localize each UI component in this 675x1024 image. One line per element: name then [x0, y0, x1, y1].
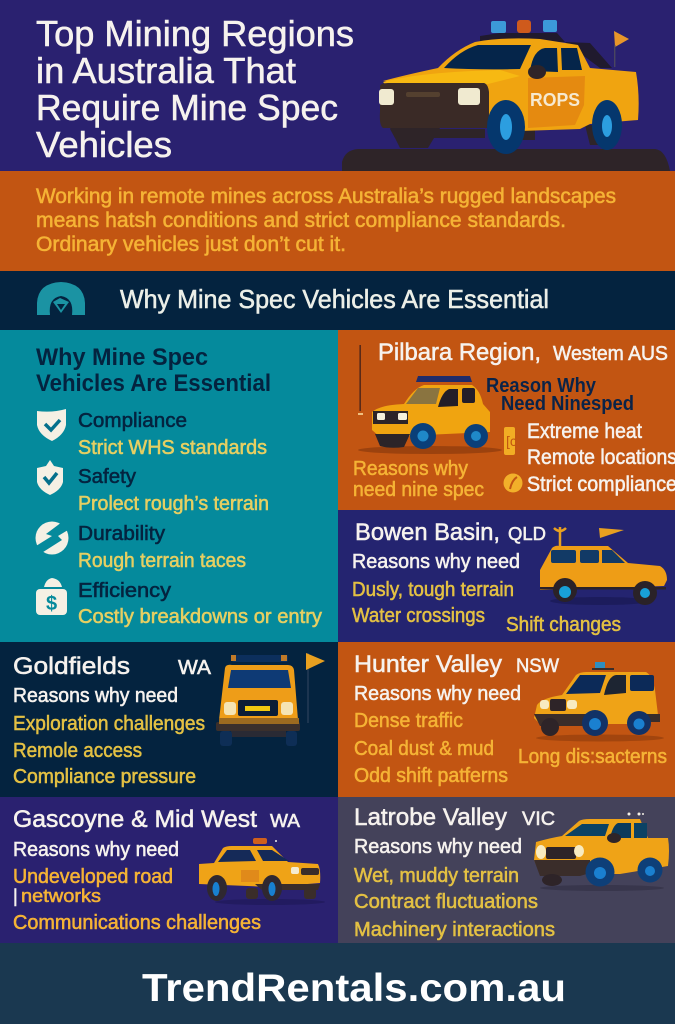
icon: durability bolt — [36, 522, 68, 554]
icon: bowen vehicle — [540, 527, 667, 605]
goldfields list: Remole access — [13, 740, 142, 762]
panel: bowen basin — [338, 510, 675, 642]
hunter heading — [354, 651, 559, 678]
durability item: Durability — [78, 523, 165, 545]
pilbara heading: Pilbara Region, — [378, 339, 541, 366]
pilbara heading: Westem AUS — [553, 343, 668, 365]
intro text: means hatsh conditions and strict compliance standards. — [36, 209, 566, 232]
hunter heading: NSW — [516, 656, 559, 677]
marker line — [358, 345, 363, 415]
pilbara caption: Reasons why — [353, 458, 468, 480]
intro band — [0, 171, 675, 271]
truck door label: ROPS — [530, 90, 580, 110]
efficiency item: Costly breakdowns or entry — [78, 606, 322, 628]
gascoyne list: Communications challenges — [13, 912, 261, 934]
bowen heading: Bowen Basin, — [355, 519, 500, 546]
bowen list: Shift changes — [506, 614, 621, 636]
title: Require Mine Spec — [36, 87, 338, 128]
icon: safety shield — [37, 460, 63, 495]
icon: efficiency money bag: $ — [46, 593, 57, 615]
pilbara caption: need nine spec — [353, 479, 484, 501]
pilbara sub-heading — [486, 375, 634, 415]
safety item — [78, 466, 269, 515]
panel: hunter valley — [338, 642, 675, 797]
compliance item: Compliance — [78, 410, 187, 432]
intro text: Ordinary vehicles just don’t cut it. — [36, 233, 346, 256]
pilbara heading — [378, 339, 668, 366]
hunter heading: Hunter Valley — [354, 651, 502, 678]
panel: gascoyne and mid west — [0, 797, 338, 943]
icon: teal arch badge — [37, 282, 85, 315]
icon: leaf badge — [504, 474, 522, 492]
hunter list: Odd shift patferns — [354, 765, 508, 787]
pilbara caption — [353, 458, 484, 501]
title: Vehicles — [36, 124, 172, 165]
panel heading: Why Mine Spec — [36, 344, 208, 371]
panel: goldfields — [0, 642, 338, 797]
section heading band — [0, 271, 675, 330]
gascoyne heading: Gascoyne & Mid West — [13, 806, 257, 833]
panel: latrobe valley — [338, 797, 675, 943]
goldfields heading: WA — [178, 657, 212, 679]
pilbara list — [527, 420, 675, 496]
pilbara sub-heading: Need Ninesped — [501, 393, 634, 415]
durability item — [78, 523, 246, 572]
icon: document tag — [504, 427, 517, 455]
title: Top Mining Regions — [36, 13, 354, 54]
gascoyne list: | — [13, 886, 18, 906]
intro text: Working in remote mines across Australia’s rugged landscapes — [36, 185, 616, 208]
durability item: Rough terrain taces — [78, 550, 246, 572]
gascoyne list — [13, 839, 261, 934]
efficiency item: Efficiency — [78, 580, 171, 602]
gascoyne list: Reasons why need — [13, 839, 179, 861]
latrobe list: Contract fluctuations — [354, 891, 538, 913]
goldfields heading: Goldfields — [13, 653, 130, 680]
gascoyne heading: WA — [270, 811, 300, 831]
latrobe list — [354, 836, 555, 941]
panel: pilbara region — [338, 330, 675, 510]
pilbara sub-heading: Reason Why — [486, 375, 597, 397]
pilbara list: Extreme heat — [527, 420, 642, 443]
compliance item: Strict WHS standards — [78, 437, 267, 459]
hunter list: Reasons why need — [354, 683, 521, 705]
intro text — [36, 185, 616, 256]
hunter list: Dense traffic — [354, 710, 463, 732]
bowen list: Dusly, tough terrain — [352, 579, 514, 601]
icon: compliance shield — [37, 409, 66, 441]
hunter list: Coal dust & mud — [354, 738, 494, 760]
latrobe list: Wet, muddy terrain — [354, 865, 519, 887]
bowen heading: QLD — [508, 524, 546, 544]
goldfields list: Exploration challenges — [13, 713, 205, 735]
gascoyne list: networks — [21, 886, 101, 906]
icon: hunter vehicle — [534, 662, 664, 742]
goldfields list: Compliance pressure — [13, 766, 196, 788]
title — [36, 13, 354, 165]
bowen list — [352, 551, 621, 636]
footer band — [0, 943, 675, 1024]
panel heading — [36, 344, 271, 397]
goldfields list: Reasons why need — [13, 685, 178, 707]
efficiency item — [78, 580, 322, 628]
panel heading: Vehicles Are Essential — [36, 370, 271, 397]
panel: why mine spec vehicles are essential — [0, 330, 338, 642]
hunter list — [354, 683, 667, 787]
icon: hero pickup truck — [342, 20, 670, 171]
icon: efficiency money bag — [36, 578, 67, 615]
latrobe list: Reasons why need — [354, 836, 522, 858]
latrobe heading: Latrobe Valley — [354, 804, 507, 831]
bowen list: Water crossings — [352, 605, 485, 627]
compliance item — [78, 410, 267, 459]
safety item: Prolect rough’s terrain — [78, 493, 269, 515]
header panel — [0, 0, 675, 171]
icon: goldfields truck — [216, 653, 325, 746]
footer url: TrendRentals.com.au — [142, 967, 566, 1010]
icon: pilbara vehicle — [358, 376, 502, 454]
hunter list: Long dis:sacterns — [518, 746, 667, 768]
safety item: Safety — [78, 466, 136, 488]
title: in Australia That — [36, 50, 296, 91]
latrobe list: Machinery interactions — [354, 919, 555, 941]
section heading: Why Mine Spec Vehicles Are Essential — [120, 284, 549, 314]
gascoyne list: Undeveloped road — [13, 866, 173, 888]
goldfields heading — [13, 653, 212, 680]
goldfields list — [13, 685, 205, 788]
icon: latrobe vehicle — [534, 812, 669, 891]
bowen list: Reasons why need — [352, 551, 520, 573]
icon: document tag: [c — [506, 433, 517, 449]
icon: gascoyne vehicle — [199, 838, 325, 905]
latrobe heading: VIC — [522, 809, 555, 830]
